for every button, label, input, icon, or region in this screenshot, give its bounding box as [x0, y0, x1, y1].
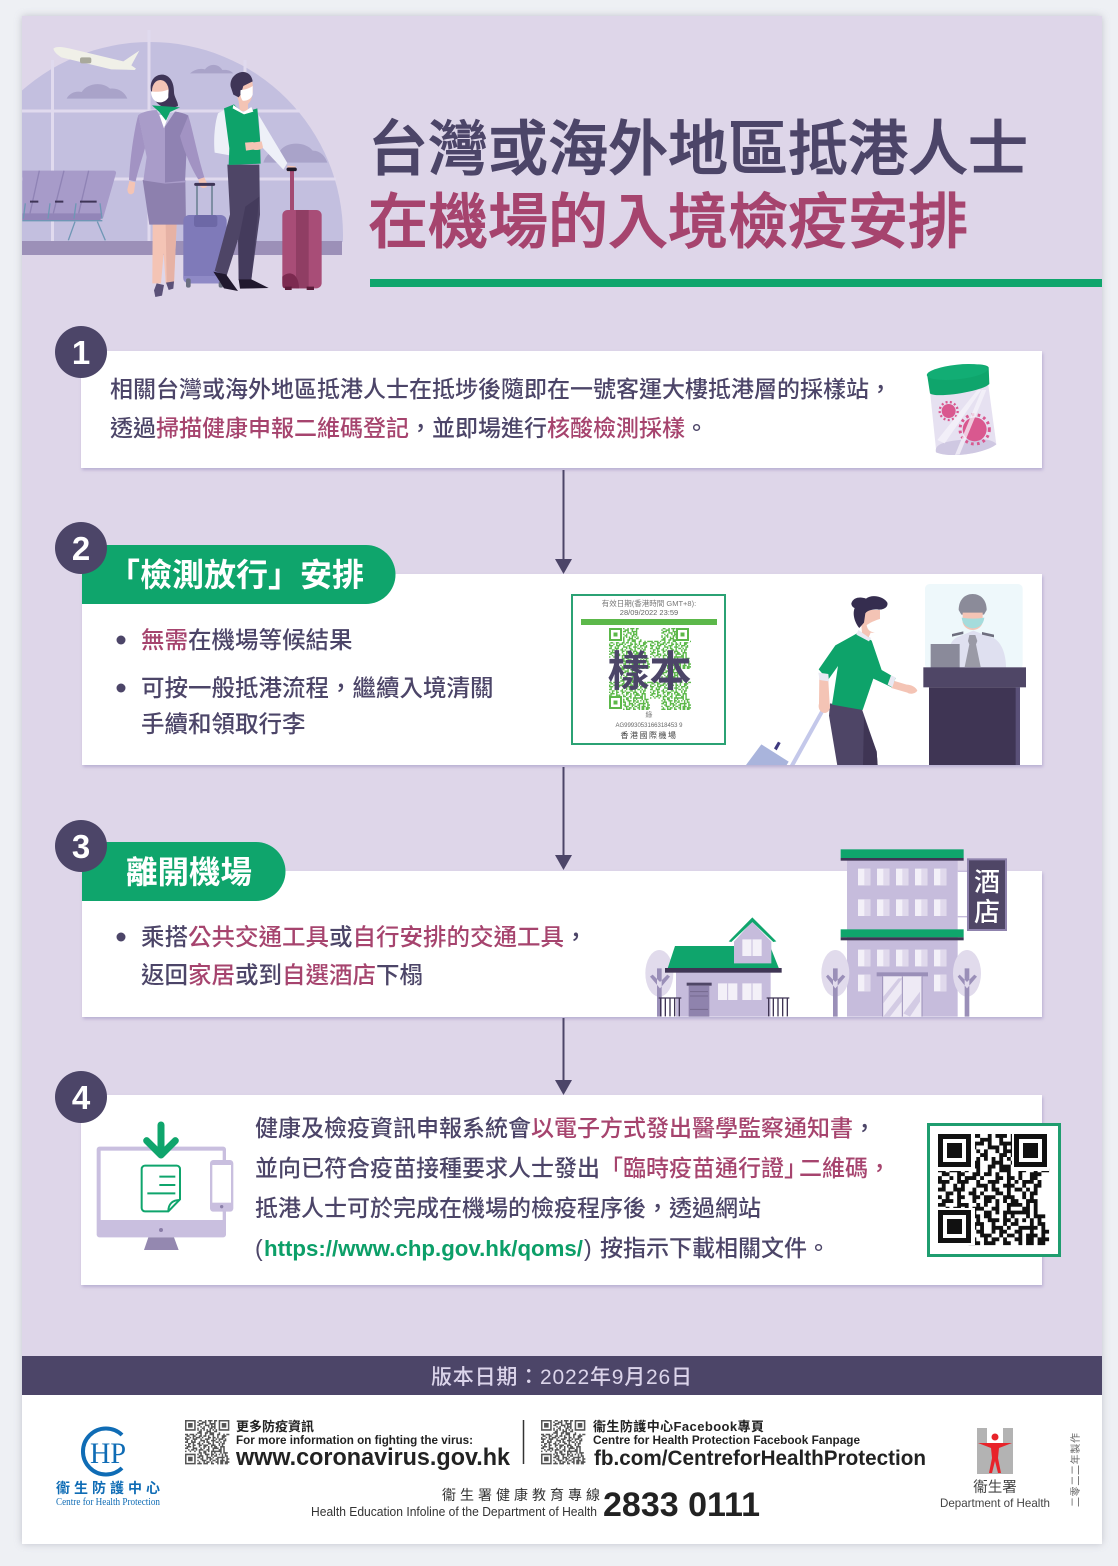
arrow: step 2 to step 3: [555, 767, 572, 870]
sample QR card: 有效日期(香港時間 GMT+8):: [602, 598, 696, 608]
clouds: [67, 65, 327, 163]
woman: [151, 75, 178, 108]
logo: Department of Health: 衞生署: [973, 1479, 1017, 1496]
sample QR card: 香港國際機場: [620, 730, 678, 740]
illustration: house and hotel: [645, 849, 1006, 1017]
step 2 bullets: [116, 627, 494, 737]
icon: computer download: [97, 1125, 233, 1250]
hotel sign text: [974, 867, 1000, 927]
step 4 text: 抵港人士可於完成在機場的檢疫程序後，透過網站: [255, 1195, 761, 1221]
chairs: [22, 171, 116, 220]
step 4 text: 健康及檢疫資訊申報系統會以電子方式發出醫學監察通知書，: [255, 1115, 876, 1141]
Facebook text: Centre for Health Protection Facebook Fanpage: [593, 1433, 860, 1447]
version date bar: 版本日期：2022年9月26日: [431, 1366, 692, 1389]
coronavirus site text: www.coronavirus.gov.hk: [235, 1444, 511, 1471]
step 2 bullets: 手續和領取行李: [141, 711, 306, 737]
panel: step 4: [55, 1071, 1060, 1285]
panel: step 1: [55, 326, 1042, 468]
sample QR card: AG9993053166318453 9: [615, 723, 683, 729]
step 3 number: 3: [72, 828, 90, 865]
step 3 heading pill: [82, 842, 286, 901]
step 2 number: [55, 522, 107, 574]
arrow: step 3 to step 4: [555, 1018, 572, 1095]
sample QR card: 28/09/2022 23:59: [620, 608, 678, 617]
step 3 number: [55, 820, 107, 872]
step 4 text: https://www.chp.gov.hk/qoms/: [264, 1236, 583, 1261]
step 2 bullets: 無需在機場等候結果: [141, 627, 352, 653]
sample QR card: 綠: [646, 710, 652, 719]
step 2 bullets: 可按一般抵港流程，繼續入境清關: [141, 675, 494, 701]
step 3 bullets: [116, 924, 588, 988]
Facebook text: fb.com/CentreforHealthProtection: [594, 1447, 926, 1470]
health infoline: 2833 0111: [603, 1486, 760, 1524]
health infoline: Health Education Infoline of the Department of Health: [311, 1504, 597, 1519]
title: [368, 116, 1028, 256]
step 4 number: 4: [72, 1079, 91, 1116]
step 2 number: 2: [72, 530, 90, 567]
title: 台灣或海外地區抵港人士: [368, 116, 1028, 183]
plane: [53, 47, 139, 70]
hotel: [847, 857, 958, 1017]
hotel sign text: 酒: [974, 867, 1000, 897]
panel: step 3: [55, 820, 1042, 1017]
illustration: traveller at counter: [746, 584, 1026, 766]
arrow: step 1 to step 2: [555, 470, 572, 574]
Facebook text: [593, 1419, 926, 1470]
logo: Centre for Health Protection: HP: [90, 1437, 126, 1470]
illustration: airport travellers: [22, 42, 343, 297]
production note: 二零二二年製作: [1069, 1433, 1082, 1507]
purple suitcase: [197, 185, 212, 217]
step 1 number: 1: [72, 334, 90, 371]
step 3 bullets: 乘搭公共交通工具或自行安排的交通工具，: [141, 924, 588, 950]
step 4 text: 並向已符合疫苗接種要求人士發出「臨時疫苗通行證」: [255, 1155, 807, 1181]
coronavirus site text: 更多防疫資訊: [236, 1419, 314, 1434]
step 1 number: [55, 326, 107, 378]
small QR: coronavirus site: [185, 1421, 229, 1464]
step 2 heading pill: 「檢測放行」安排: [108, 557, 364, 593]
step 4 number: [55, 1071, 107, 1123]
step 1 text: 相關台灣或海外地區抵港人士在抵埗後隨即在一號客運大樓抵港層的採樣站，: [110, 376, 892, 402]
step 4 text: 按指示下載相關文件。: [600, 1235, 830, 1261]
man: [215, 165, 260, 280]
panel: step 2: [55, 522, 1042, 766]
small QR: Facebook: [541, 1421, 585, 1464]
logo: Centre for Health Protection: Centre for Health Protection: [56, 1497, 160, 1508]
step 1 text: 透過: [110, 415, 156, 441]
step 4 text: ，: [868, 1155, 891, 1181]
coronavirus site text: [235, 1419, 511, 1471]
logo: Centre for Health Protection: [56, 1428, 160, 1508]
sample QR card: [572, 595, 725, 744]
Facebook text: 衞生防護中心Facebook專頁: [593, 1419, 764, 1434]
coronavirus site text: For more information on fighting the virus:: [236, 1433, 473, 1447]
step 2 heading pill: [82, 545, 396, 604]
health infoline: 衞生署健康教育專線: [442, 1487, 600, 1503]
logo: Centre for Health Protection: 衞生防護中心: [56, 1480, 160, 1496]
logo: Department of Health: [940, 1428, 1050, 1510]
green rule: [370, 279, 1102, 287]
QR code: [928, 1124, 1060, 1256]
step 1 text: 掃描健康申報二維碼登記，並即場進行核酸檢測採樣。: [156, 415, 708, 441]
step 3 bullets: 返回家居或到自選酒店下榻: [141, 962, 423, 988]
hotel sign text: 店: [974, 897, 1000, 927]
step 3 heading pill: 離開機場: [126, 854, 252, 890]
step 4 text: [255, 1115, 891, 1261]
step 4 text: (: [255, 1235, 263, 1261]
version date bar: [22, 1356, 1102, 1395]
logo: Department of Health: Department of Health: [940, 1496, 1050, 1510]
step 4 text: ): [584, 1235, 592, 1261]
sample QR card: 樣本: [607, 648, 692, 695]
maroon suitcase: [286, 170, 298, 212]
health infoline: [311, 1486, 760, 1524]
house: [645, 950, 673, 997]
step 4 text: 二維碼: [799, 1155, 868, 1181]
footer: [22, 1395, 1102, 1544]
icon: specimen jar: [926, 362, 996, 455]
title: 在機場的入境檢疫安排: [368, 189, 968, 256]
